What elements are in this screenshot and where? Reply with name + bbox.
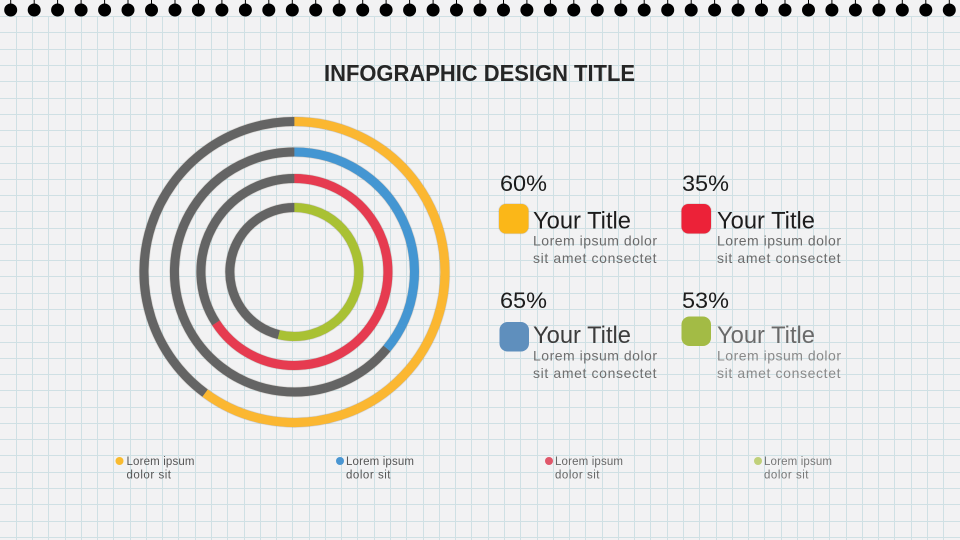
stat: 53% green: Lorem ipsum dolor — [717, 348, 841, 364]
stat: 60% yellow: 60% — [500, 171, 547, 196]
stat: 53% green: 53% — [682, 288, 729, 313]
legend: blue — [336, 456, 414, 482]
legend: green: Lorem ipsum — [764, 456, 832, 468]
stat: 65% blue — [500, 288, 657, 381]
stat: 35% red: Lorem ipsum dolor — [717, 232, 841, 248]
stat: 35% red: 35% — [682, 171, 729, 196]
stat: 65% blue: 65% — [500, 288, 547, 313]
stat: 35% red: sit amet consectet — [717, 250, 841, 266]
legend: blue: dolor sit — [346, 470, 391, 482]
legend: blue: Lorem ipsum — [346, 456, 414, 468]
stat: 60% yellow: Lorem ipsum dolor — [533, 232, 657, 248]
stat: 35% red: Your Title — [717, 208, 815, 234]
ring: outer yellow 60% — [144, 121, 445, 422]
legend: green — [754, 456, 832, 482]
icon: blue swatch — [500, 322, 529, 352]
stat: 60% yellow: sit amet consectet — [533, 250, 657, 266]
ring: blue 36% — [174, 152, 414, 392]
stat: 60% yellow: Your Title — [533, 208, 631, 234]
stat: 53% green: sit amet consectet — [717, 365, 841, 381]
legend: yellow: Lorem ipsum — [126, 456, 194, 468]
stat: 35% red — [682, 171, 841, 266]
legend: yellow — [116, 456, 194, 482]
ring: red 65% — [201, 178, 388, 366]
legend: red: Lorem ipsum — [555, 456, 623, 468]
stat: 65% blue: Your Title — [533, 322, 631, 349]
title: INFOGRAPHIC DESIGN TITLE — [324, 60, 635, 86]
stat: 53% green — [682, 288, 841, 381]
legend: red — [545, 456, 623, 482]
legend: red: dolor sit — [555, 470, 600, 482]
ring: green 53% — [230, 207, 359, 336]
legend: green: dolor sit — [764, 470, 809, 482]
icon: red swatch — [682, 204, 711, 234]
radial progress chart — [144, 121, 445, 422]
stat: 60% yellow — [499, 171, 657, 266]
icon: yellow swatch — [499, 204, 528, 234]
icon: green swatch — [682, 316, 711, 346]
spiral binding holes — [5, 0, 955, 16]
stat: 53% green: Your Title — [717, 322, 815, 349]
legend: yellow: dolor sit — [126, 470, 172, 482]
stat: 65% blue: Lorem ipsum dolor — [533, 348, 657, 364]
stat: 65% blue: sit amet consectet — [533, 365, 657, 381]
